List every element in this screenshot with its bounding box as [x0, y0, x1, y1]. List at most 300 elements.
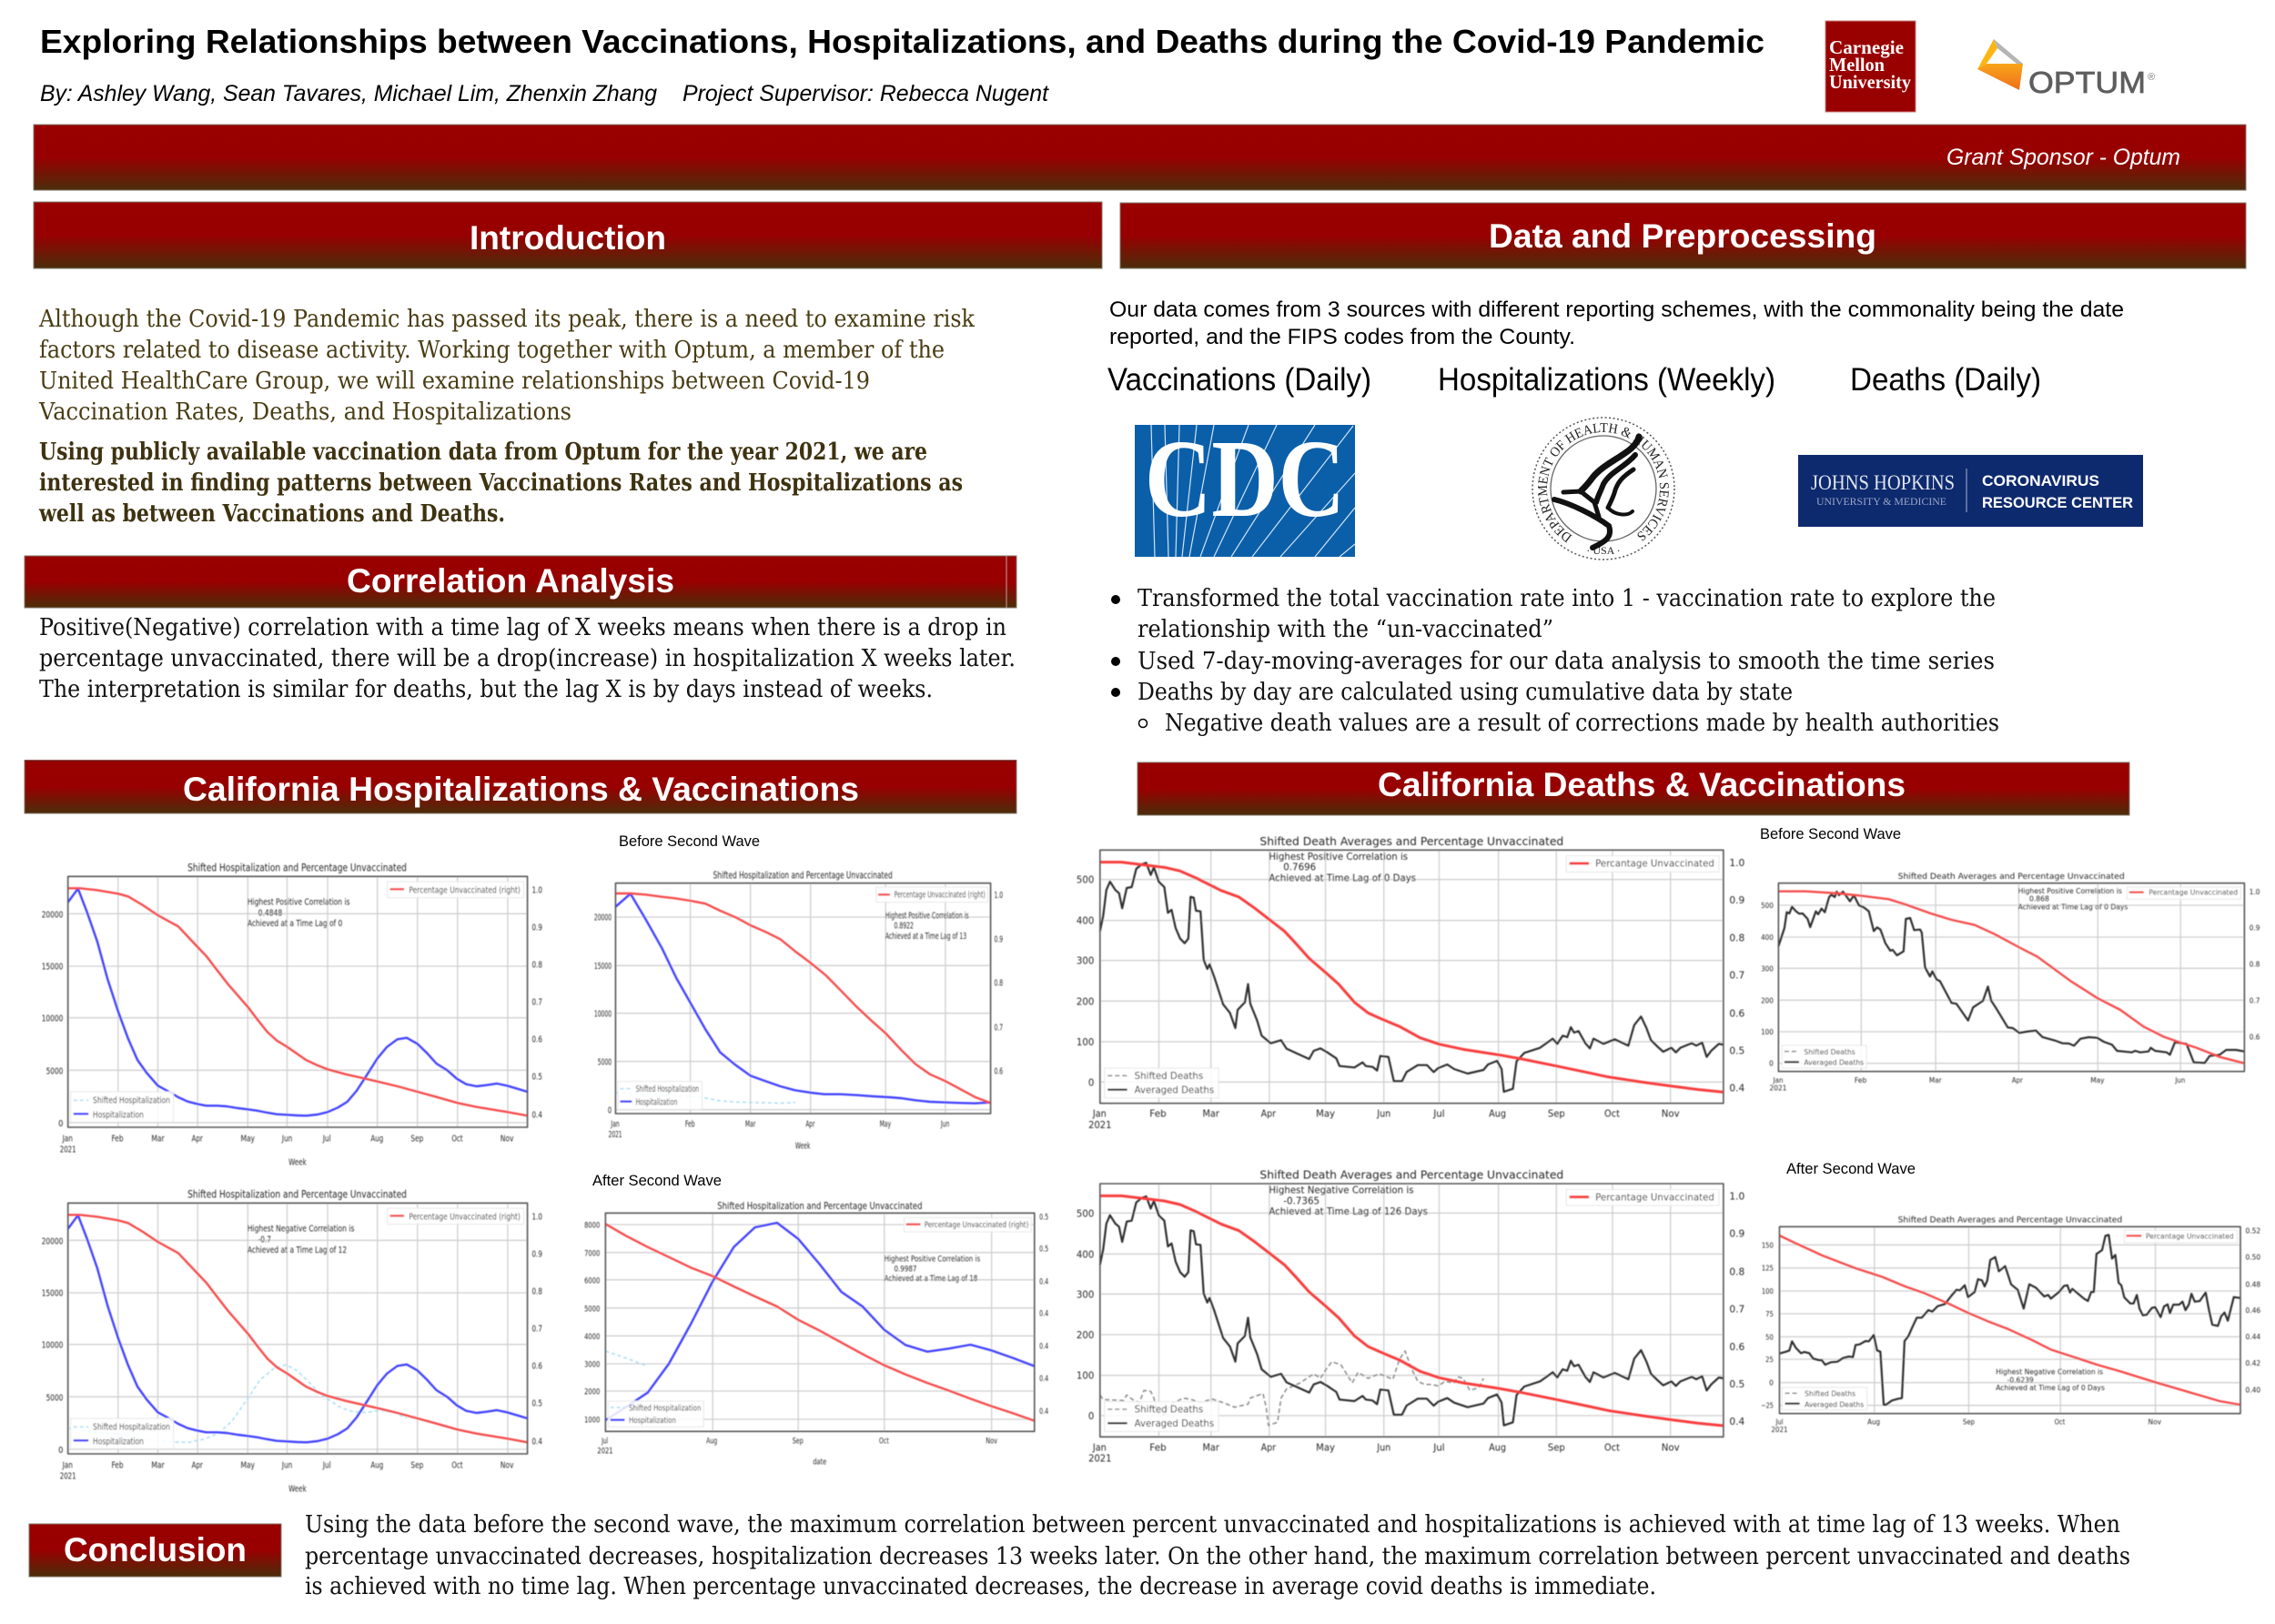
- month labels: [60, 1460, 514, 1494]
- correlation annotation: [248, 896, 350, 929]
- right axis labels: [531, 1211, 542, 1447]
- legend: unvaccinated: Percentage Unvaccinated (right): [925, 1220, 1028, 1230]
- source label: Vaccinations: Vaccinations (Daily): [1107, 362, 1371, 398]
- right axis labels: 0.44: [2245, 1332, 2260, 1341]
- legend: unvaccinated: [876, 887, 987, 903]
- chart: hospitalization full year, positive correlation: [42, 862, 542, 1167]
- month labels: 2021: [609, 1130, 622, 1140]
- left axis labels: 200: [1077, 1330, 1094, 1341]
- correlation annotation: 0.8922: [894, 922, 914, 932]
- chart title: Shifted Hospitalization and Percentage Unvaccinated: [187, 862, 407, 873]
- hospitalization line: [615, 893, 991, 1104]
- legend: deaths: Averaged Deaths: [1804, 1058, 1864, 1067]
- correlation annotation: Achieved at a Time Lag of 13: [885, 932, 966, 942]
- legend: hospitalization: [618, 1082, 702, 1109]
- left axis labels: 100: [1762, 1286, 1774, 1296]
- correlation annotation: [1269, 852, 1416, 883]
- correlation annotation: Highest Positive Correlation is: [2018, 886, 2122, 895]
- correlation annotation: [885, 1255, 980, 1284]
- right axis labels: 0.4: [1039, 1309, 1048, 1319]
- legend: hospitalization: Hospitalization: [93, 1109, 144, 1120]
- month labels: 2021: [60, 1471, 76, 1481]
- month labels: Apr: [2012, 1075, 2023, 1084]
- month labels: Apr: [805, 1120, 814, 1130]
- month labels: Jan: [1092, 1442, 1107, 1453]
- logo: Optum: OPTUM: [2028, 66, 2146, 99]
- percentage unvaccinated line: [68, 888, 528, 1115]
- month labels: 2021: [1088, 1120, 1111, 1131]
- month labels: Jan: [1773, 1075, 1783, 1084]
- right axis labels: 0.6: [2250, 1033, 2260, 1042]
- averaged deaths line: [1778, 892, 2244, 1063]
- conclusion text: is achieved with no time lag. When percentage unvaccinated decreases, the decrease in average covid deaths is immediate.: [305, 1572, 1656, 1600]
- left axis labels: 1000: [584, 1416, 600, 1426]
- logo: Johns Hopkins Coronavirus Resource Center: CORONAVIRUS: [1982, 472, 2099, 489]
- month labels: [597, 1437, 997, 1467]
- legend: hospitalization: Shifted Hospitalization: [93, 1095, 170, 1105]
- shifted deaths line: [1100, 1351, 1483, 1426]
- right axis labels: 1.0: [531, 884, 542, 895]
- chart title: Shifted Death Averages and Percentage Unvaccinated: [1898, 872, 2125, 882]
- month labels: Feb: [111, 1460, 124, 1470]
- correlation explanation text: Positive(Negative) correlation with a time lag of X weeks means when there is a drop in: [39, 613, 1006, 641]
- right axis labels: 0.9: [1729, 1228, 1744, 1240]
- legend: hospitalization: Hospitalization: [636, 1098, 677, 1107]
- month labels: [1088, 1108, 1680, 1131]
- right axis labels: 0.5: [1039, 1245, 1048, 1254]
- legend: deaths: Averaged Deaths: [1135, 1418, 1214, 1429]
- left axis labels: 10000: [594, 1010, 612, 1019]
- month labels: Mar: [1202, 1442, 1219, 1453]
- right axis labels: 0.9: [1729, 895, 1744, 906]
- right axis labels: 0.48: [2245, 1280, 2260, 1288]
- right axis labels: 0.8: [1729, 1266, 1744, 1277]
- month labels: 2021: [1771, 1425, 1788, 1434]
- authors and supervisor: By: Ashley Wang, Sean Tavares, Michael Lim, Zhenxin Zhang: [40, 81, 657, 106]
- right axis labels: [531, 884, 542, 1120]
- logo: Department of Health and Human Services seal: · USA ·: [1586, 544, 1621, 557]
- right axis labels: [2250, 887, 2260, 1042]
- month labels: May: [2090, 1075, 2105, 1084]
- month labels: 2021: [60, 1145, 76, 1155]
- left axis labels: 2000: [584, 1387, 600, 1397]
- averaged deaths line: [1100, 862, 1724, 1092]
- legend: unvaccinated: Percantage Unvaccinated: [1595, 1192, 1714, 1203]
- label: After Second Wave (hospitalizations): After Second Wave: [592, 1172, 722, 1189]
- right axis labels: 0.5: [531, 1072, 542, 1082]
- month labels: Jul: [1775, 1417, 1783, 1426]
- right axis labels: 0.5: [1729, 1045, 1744, 1056]
- month labels: Mar: [151, 1460, 165, 1470]
- right axis labels: 0.5: [1729, 1379, 1744, 1390]
- legend: unvaccinated: Percantage Unvaccinated: [2146, 1232, 2234, 1241]
- chart: hospitalization full year, negative correlation: [42, 1188, 542, 1494]
- left axis labels: 3000: [584, 1360, 600, 1370]
- right axis labels: 0.7: [2250, 996, 2260, 1005]
- right axis labels: 0.4: [1039, 1374, 1048, 1384]
- correlation annotation: [885, 912, 969, 942]
- percentage unvaccinated line: [68, 1215, 528, 1442]
- legend: unvaccinated: Percentage Unvaccinated (right): [894, 891, 986, 901]
- legend: deaths: [1782, 1045, 1866, 1068]
- month labels: Nov: [1662, 1442, 1680, 1453]
- logo: Carnegie Mellon University: Mellon: [1829, 54, 1885, 76]
- correlation annotation: Achieved at a Time Lag of 12: [248, 1245, 347, 1256]
- legend: hospitalization: Hospitalization: [629, 1416, 676, 1426]
- left axis labels: 20000: [42, 1236, 63, 1246]
- month labels: Jul: [1432, 1442, 1445, 1453]
- legend: deaths: [1105, 1068, 1218, 1098]
- right axis labels: 0.7: [531, 1323, 542, 1334]
- left axis labels: 150: [1762, 1241, 1774, 1249]
- left axis labels: 5000: [598, 1058, 612, 1067]
- bullet list: Used 7-day-moving-averages for our data analysis to smooth the time series: [1138, 647, 1995, 675]
- left axis labels: 0: [1769, 1378, 1774, 1387]
- legend: unvaccinated: [1566, 856, 1719, 872]
- bullet list: Transformed the total vaccination rate into 1 - vaccination rate to explore the: [1138, 584, 1996, 612]
- left axis labels: 500: [1077, 874, 1094, 886]
- chart: deaths after second wave: [1761, 1215, 2260, 1434]
- averaged deaths line: [1100, 1196, 1724, 1426]
- right axis labels: 0.4: [531, 1109, 542, 1120]
- correlation explanation text: [39, 613, 1016, 703]
- left axis labels: 7000: [584, 1249, 600, 1258]
- left axis labels: −25: [1761, 1401, 1774, 1410]
- correlation annotation: Highest Positive Correlation is: [1269, 852, 1408, 862]
- panel heading: Data and Preprocessing: [1120, 203, 2246, 268]
- chart title: Shifted Hospitalization and Percentage Unvaccinated: [187, 1188, 407, 1200]
- logo: Carnegie Mellon University: University: [1829, 71, 1911, 93]
- introduction bold text: well as between Vaccinations and Deaths.: [38, 499, 505, 528]
- month labels: Jun: [1377, 1442, 1390, 1453]
- left axis labels: 20000: [42, 909, 63, 920]
- left axis labels: 10000: [42, 1340, 63, 1350]
- logo: Johns Hopkins Coronavirus Resource Center: [1798, 455, 2143, 527]
- panel heading: Introduction: [34, 202, 1102, 268]
- month labels: Apr: [192, 1134, 203, 1144]
- panel heading: Correlation Analysis: [25, 556, 1016, 608]
- month labels: Feb: [111, 1134, 124, 1144]
- left axis labels: 0: [1769, 1059, 1774, 1068]
- hospitalization line: [605, 1223, 1035, 1420]
- legend: hospitalization: Shifted Hospitalization: [93, 1422, 170, 1432]
- right axis labels: 0.9: [994, 935, 1003, 944]
- legend: deaths: Averaged Deaths: [1135, 1084, 1214, 1095]
- legend: unvaccinated: Percentage Unvaccinated (right): [409, 884, 521, 895]
- month labels: Sep: [1963, 1417, 1975, 1426]
- month labels: date: [813, 1458, 826, 1467]
- right axis labels: 1.0: [2250, 887, 2260, 896]
- legend: deaths: [1105, 1402, 1218, 1431]
- chart: hospitalization before second wave: [594, 870, 1003, 1152]
- right axis labels: 0.8: [531, 1286, 542, 1296]
- data sources intro text: [1109, 298, 2124, 349]
- legend: hospitalization: [71, 1418, 174, 1448]
- right axis labels: [1729, 858, 1744, 1094]
- legend: hospitalization: Hospitalization: [93, 1436, 144, 1447]
- right axis labels: 0.8: [994, 979, 1003, 989]
- legend: unvaccinated: [2124, 1230, 2237, 1243]
- month labels: Mar: [151, 1134, 165, 1144]
- correlation annotation: 0.9987: [894, 1265, 917, 1274]
- left axis labels: 400: [1077, 915, 1094, 927]
- right axis labels: 0.40: [2245, 1386, 2260, 1394]
- logo: Carnegie Mellon University: [1825, 21, 1916, 112]
- left axis labels: 15000: [42, 962, 63, 972]
- right axis labels: 0.8: [2250, 960, 2260, 969]
- panel heading: California Deaths & Vaccinations: [1138, 762, 2129, 815]
- title: Exploring Relationships between Vaccinations, Hospitalizations, and Deaths during the Covid-19 Pandemic: [40, 23, 1764, 60]
- authors and supervisor: Project Supervisor: Rebecca Nugent: [682, 81, 1049, 106]
- correlation annotation: Highest Positive Correlation is: [248, 896, 350, 907]
- left axis labels: [1761, 1241, 1774, 1410]
- left axis labels: 0: [58, 1445, 63, 1456]
- right axis labels: 0.7: [994, 1024, 1003, 1033]
- legend: hospitalization: Shifted Hospitalization: [636, 1084, 699, 1094]
- month labels: Feb: [1149, 1442, 1167, 1453]
- chart title: Shifted Hospitalization and Percentage Unvaccinated: [713, 870, 893, 881]
- legend: hospitalization: [71, 1092, 174, 1122]
- correlation annotation: -0.6239: [2007, 1376, 2034, 1384]
- month labels: Aug: [1489, 1442, 1506, 1453]
- label: Before Second Wave (deaths): Before Second Wave: [1760, 825, 1901, 842]
- correlation annotation: Achieved at Time Lag of 0 Days: [1996, 1383, 2105, 1392]
- month labels: 2021: [1770, 1084, 1786, 1092]
- month labels: Jan: [611, 1120, 620, 1130]
- left axis labels: 500: [1077, 1208, 1094, 1219]
- left axis labels: 25: [1765, 1355, 1774, 1364]
- logo: Johns Hopkins Coronavirus Resource Center: RESOURCE CENTER: [1982, 494, 2133, 511]
- right axis labels: 1.0: [1729, 858, 1744, 869]
- hospitalization line: [68, 889, 528, 1115]
- left axis labels: 300: [1077, 955, 1094, 967]
- month labels: Feb: [1855, 1075, 1866, 1084]
- shifted hospitalization line: [68, 1365, 407, 1442]
- month labels: Nov: [1662, 1108, 1680, 1120]
- month labels: Aug: [706, 1437, 717, 1447]
- right axis labels: [1039, 1213, 1048, 1417]
- right axis labels: 0.6: [1729, 1342, 1744, 1353]
- right axis labels: 0.6: [531, 1360, 542, 1371]
- correlation annotation: [1269, 1185, 1428, 1217]
- logo: CDC: CDC: [1145, 418, 1345, 540]
- left axis labels: 200: [1077, 996, 1094, 1007]
- panel heading: California Hospitalizations & Vaccinations: [25, 761, 1016, 813]
- month labels: May: [1316, 1442, 1335, 1453]
- legend: unvaccinated: [388, 1208, 524, 1225]
- legend: unvaccinated: [1566, 1189, 1719, 1205]
- percentage unvaccinated line: [1100, 862, 1724, 1092]
- bullet list: relationship with the “un-vaccinated”: [1138, 615, 1553, 643]
- left axis labels: [1761, 901, 1774, 1068]
- left axis labels: 5000: [46, 1392, 63, 1403]
- correlation annotation: [248, 1223, 355, 1256]
- right axis labels: 0.6: [994, 1067, 1003, 1077]
- left axis labels: 400: [1077, 1249, 1094, 1260]
- panel heading: Correlation Analysis: Correlation Analysis: [347, 562, 674, 600]
- legend: unvaccinated: [388, 882, 524, 898]
- left axis labels: 6000: [584, 1276, 600, 1286]
- legend: deaths: [1782, 1387, 1867, 1409]
- left axis labels: 8000: [584, 1221, 600, 1231]
- month labels: Sep: [410, 1134, 423, 1144]
- label: Before Second Wave (hospitalizations): Before Second Wave: [619, 832, 760, 850]
- right axis labels: 0.7: [531, 996, 542, 1007]
- correlation annotation: -0.7365: [1283, 1195, 1320, 1206]
- right axis labels: [2245, 1226, 2260, 1394]
- right axis labels: 0.8: [1729, 933, 1744, 944]
- month labels: Jan: [1092, 1108, 1107, 1120]
- legend: deaths: Shifted Deaths: [1805, 1389, 1855, 1398]
- left axis labels: 15000: [42, 1288, 63, 1298]
- month labels: Apr: [1261, 1108, 1276, 1120]
- logo: Johns Hopkins Coronavirus Resource Center: UNIVERSITY & MEDICINE: [1816, 495, 1946, 508]
- month labels: Jan: [62, 1460, 73, 1470]
- left axis labels: 100: [1077, 1037, 1094, 1048]
- month labels: Jul: [322, 1460, 331, 1470]
- correlation annotation: Highest Positive Correlation is: [885, 1255, 980, 1265]
- month labels: Jun: [940, 1120, 949, 1130]
- logo: Department of Health and Human Services seal: DEPARTMENT OF HEALTH & HUMAN SERVICES: [1538, 423, 1669, 543]
- percentage unvaccinated line: [1779, 1236, 2240, 1405]
- percentage unvaccinated line: [1100, 1195, 1724, 1426]
- correlation annotation: [2018, 886, 2128, 911]
- left axis labels: [42, 909, 63, 1129]
- month labels: [1088, 1442, 1680, 1465]
- left axis labels: 4000: [584, 1332, 600, 1342]
- averaged deaths line: [1779, 1235, 2240, 1405]
- month labels: Jul: [1432, 1108, 1445, 1120]
- right axis labels: [994, 891, 1003, 1077]
- legend: unvaccinated: [905, 1217, 1031, 1232]
- chart: hospitalization after second wave: [584, 1200, 1048, 1467]
- percentage unvaccinated line: [615, 893, 991, 1103]
- correlation annotation: 0.7696: [1283, 862, 1316, 873]
- month labels: Aug: [370, 1460, 383, 1470]
- correlation annotation: Achieved at a Time Lag of 18: [885, 1274, 977, 1284]
- panel heading: Introduction: Introduction: [470, 219, 666, 257]
- month labels: May: [880, 1120, 891, 1130]
- introduction bold text: interested in finding patterns between Vaccinations Rates and Hospitalizations as: [39, 469, 963, 497]
- percentage unvaccinated line: [605, 1224, 1035, 1421]
- data sources intro text: Our data comes from 3 sources with different reporting schemes, with the commonality being the date: [1109, 298, 2124, 322]
- legend: hospitalization: Shifted Hospitalization: [629, 1404, 701, 1413]
- data sources intro text: reported, and the FIPS codes from the County.: [1109, 325, 1575, 349]
- month labels: Week: [288, 1484, 307, 1494]
- correlation annotation: -0.7: [258, 1234, 271, 1245]
- correlation explanation text: percentage unvaccinated, there will be a drop(increase) in hospitalization X weeks later.: [39, 644, 1016, 672]
- month labels: Jul: [601, 1437, 608, 1447]
- month labels: Jun: [2175, 1075, 2185, 1084]
- panel heading: Conclusion: Conclusion: [64, 1531, 247, 1569]
- left axis labels: 20000: [594, 913, 612, 923]
- month labels: Week: [288, 1157, 307, 1167]
- chart title: Shifted Death Averages and Percentage Unvaccinated: [1259, 834, 1563, 848]
- right axis labels: 0.50: [2245, 1253, 2260, 1262]
- month labels: Nov: [500, 1460, 514, 1470]
- panel heading: California Deaths & Vaccinations: California Deaths & Vaccinations: [1378, 766, 1906, 803]
- month labels: Aug: [1489, 1108, 1506, 1120]
- month labels: Jan: [62, 1134, 73, 1144]
- month labels: Jun: [281, 1134, 292, 1144]
- right axis labels: 0.6: [1729, 1008, 1744, 1019]
- percentage unvaccinated line: [1778, 892, 2244, 1064]
- introduction text: [38, 305, 976, 426]
- correlation annotation: 0.4848: [258, 907, 282, 918]
- chart: deaths full year, positive correlation: [1077, 834, 1744, 1131]
- month labels: May: [240, 1460, 255, 1470]
- month labels: [60, 1134, 514, 1167]
- legend: deaths: Averaged Deaths: [1805, 1400, 1864, 1408]
- month labels: Week: [795, 1142, 811, 1152]
- chart: deaths before second wave: [1761, 872, 2260, 1092]
- right axis labels: 1.0: [994, 891, 1003, 901]
- legend: unvaccinated: Percantage Unvaccinated: [1595, 858, 1714, 870]
- logo: Carnegie Mellon University: Carnegie: [1829, 36, 1904, 58]
- introduction text: United HealthCare Group, we will examine relationships between Covid-19: [39, 367, 870, 395]
- legend: unvaccinated: Percentage Unvaccinated (right): [409, 1211, 521, 1222]
- right axis labels: 0.4: [1039, 1342, 1048, 1352]
- month labels: Oct: [2055, 1417, 2066, 1426]
- left axis labels: [584, 1221, 600, 1426]
- month labels: Mar: [1202, 1108, 1219, 1120]
- banner: Grant Sponsor - Optum: [1946, 145, 2180, 170]
- month labels: Jun: [281, 1460, 292, 1470]
- month labels: Oct: [1604, 1108, 1620, 1120]
- legend: unvaccinated: Percantage Unvaccinated: [2149, 888, 2238, 897]
- left axis labels: 500: [1761, 901, 1774, 910]
- left axis labels: 0: [1088, 1077, 1094, 1088]
- right axis labels: 0.9: [2250, 923, 2260, 933]
- right axis labels: 0.7: [1729, 970, 1744, 982]
- correlation annotation: [1996, 1367, 2105, 1392]
- right axis labels: 0.5: [1039, 1213, 1048, 1222]
- month labels: Apr: [192, 1460, 203, 1470]
- introduction text: Although the Covid-19 Pandemic has passed its peak, there is a need to examine risk: [38, 305, 976, 333]
- left axis labels: 300: [1077, 1289, 1094, 1300]
- right axis labels: 0.52: [2245, 1226, 2260, 1236]
- correlation annotation: Highest Negative Correlation is: [1269, 1185, 1414, 1196]
- banner: [34, 125, 2246, 190]
- introduction text: factors related to disease activity. Working together with Optum, a member of the: [39, 336, 945, 364]
- correlation annotation: Achieved at Time Lag of 126 Days: [1269, 1206, 1428, 1217]
- right axis labels: 0.42: [2245, 1358, 2260, 1367]
- hospitalization line: [68, 1215, 528, 1442]
- month labels: Oct: [451, 1134, 463, 1144]
- introduction bold text: Using publicly available vaccination data from Optum for the year 2021, we are: [39, 438, 927, 466]
- left axis labels: 5000: [584, 1305, 600, 1314]
- panel heading: California Hospitalizations & Vaccinations: California Hospitalizations & Vaccinations: [183, 771, 859, 808]
- left axis labels: 100: [1077, 1370, 1094, 1382]
- month labels: Jun: [1377, 1108, 1390, 1120]
- chart title: Shifted Death Averages and Percentage Unvaccinated: [1898, 1215, 2122, 1226]
- month labels: Feb: [1149, 1108, 1167, 1120]
- left axis labels: [42, 1236, 63, 1456]
- legend: hospitalization: [608, 1401, 703, 1427]
- left axis labels: 300: [1761, 964, 1774, 973]
- bullet list: Negative death values are a result of corrections made by health authorities: [1165, 709, 1999, 737]
- legend: unvaccinated: [2127, 887, 2240, 899]
- month labels: Oct: [1604, 1442, 1620, 1453]
- month labels: 2021: [597, 1447, 613, 1456]
- month labels: Apr: [1261, 1442, 1276, 1453]
- month labels: Sep: [1548, 1108, 1565, 1120]
- right axis labels: [1729, 1191, 1744, 1427]
- correlation annotation: 0.868: [2029, 894, 2049, 903]
- right axis labels: 0.46: [2245, 1306, 2260, 1315]
- right axis labels: 0.4: [531, 1436, 542, 1447]
- introduction bold text: [38, 438, 963, 528]
